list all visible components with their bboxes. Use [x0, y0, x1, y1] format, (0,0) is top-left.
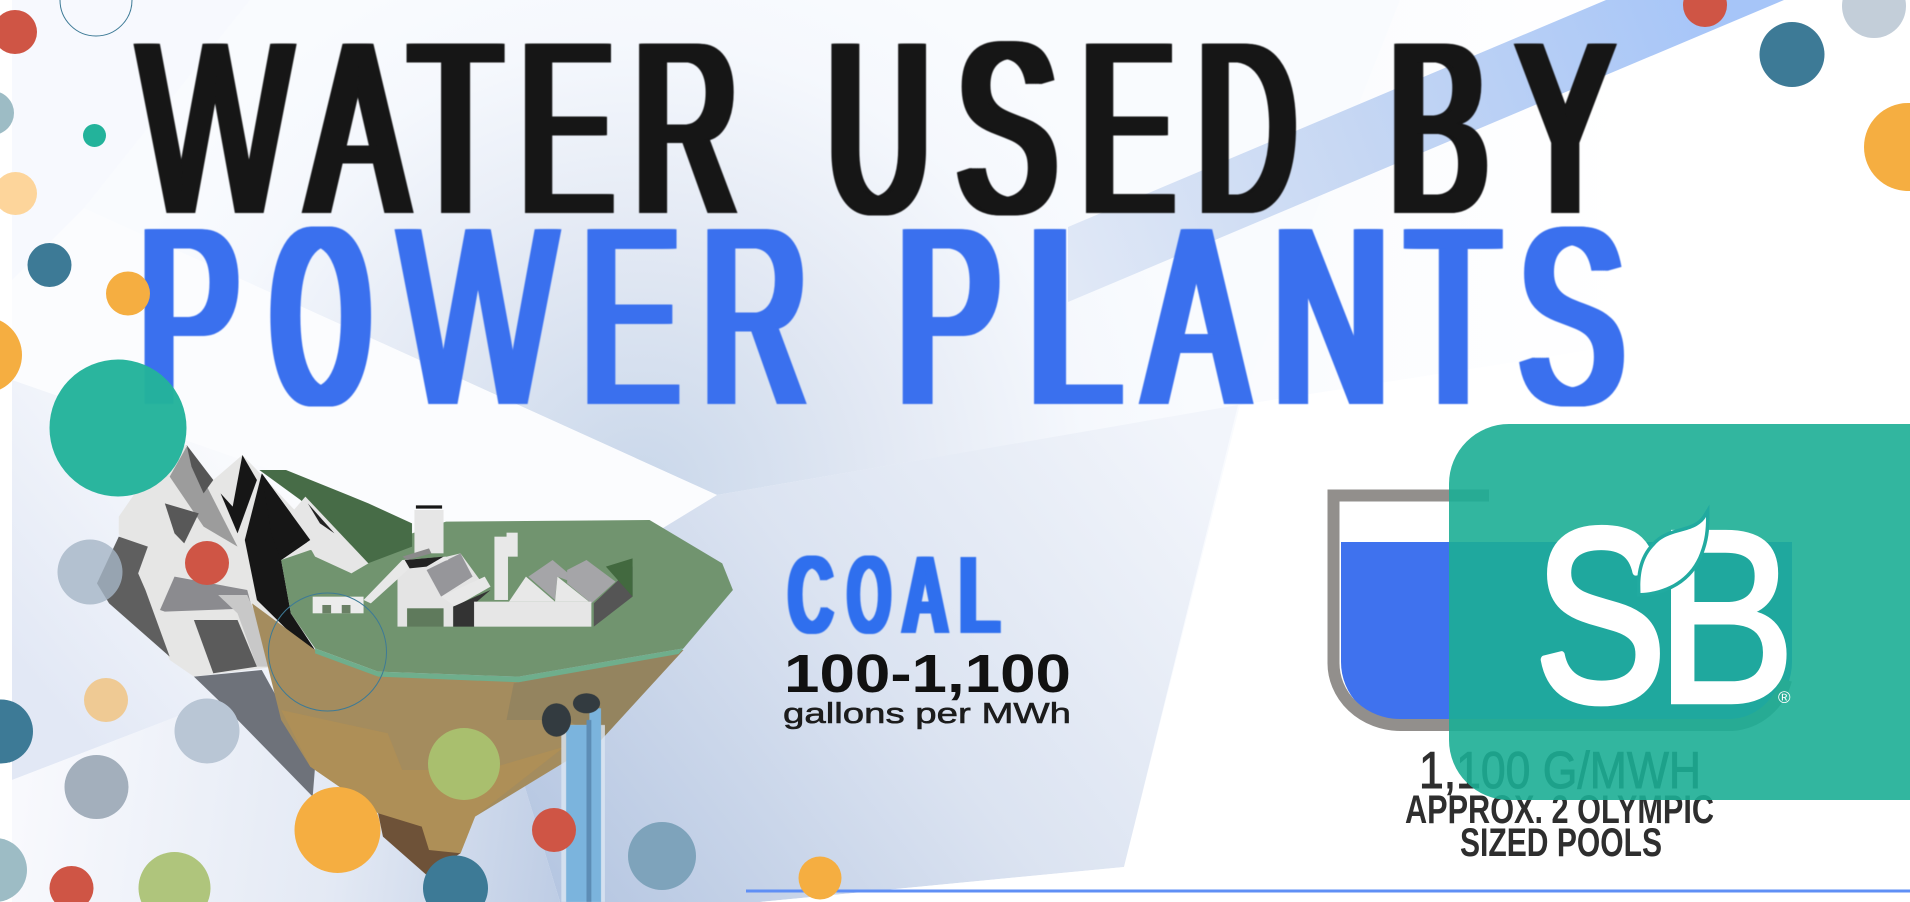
title	[132, 0, 1625, 458]
coal units: gallons per MWh	[783, 698, 1071, 730]
coal heading	[786, 534, 1002, 657]
title line 2: POWER PLANTS: W	[399, 174, 557, 458]
logo leaf	[1640, 517, 1706, 593]
tank caption	[1405, 742, 1714, 865]
coal gallons range: 100-1,100	[784, 644, 1071, 704]
power plant buildings	[313, 505, 633, 627]
SB logo	[1535, 478, 1796, 755]
registered mark: ®	[1778, 688, 1791, 707]
mountain rock face	[97, 445, 368, 797]
coal heading: A	[902, 534, 948, 657]
title line 2: POWER PLANTS: P	[898, 174, 1000, 458]
title line 2: POWER PLANTS: R	[703, 174, 806, 458]
caption: gallons: 1,100 G/MWH	[1419, 742, 1701, 800]
title line 2: POWER PLANTS: N	[1274, 174, 1388, 458]
logo letter B: B	[1656, 478, 1796, 755]
title line 2: POWER PLANTS: S	[1520, 174, 1623, 458]
discharge pipes and water	[542, 693, 605, 902]
title line 2: POWER PLANTS: L	[1028, 174, 1119, 458]
title line 2: POWER PLANTS: P	[140, 174, 239, 458]
title line 2: POWER PLANTS	[140, 174, 1625, 458]
island soil	[252, 603, 683, 875]
title line 1: WATER USED BY	[132, 0, 1618, 266]
tank icon showing water level	[1333, 496, 1792, 725]
bottom rule	[746, 890, 1910, 892]
coal heading: C	[788, 534, 833, 657]
caption: pool comparison line 2: SIZED POOLS	[1460, 821, 1662, 865]
coal heading: L	[959, 534, 1000, 657]
title line 2: POWER PLANTS: O	[274, 174, 367, 458]
title line 2: POWER PLANTS: T	[1408, 174, 1499, 458]
logo panel	[1449, 424, 1910, 800]
coal heading: O	[847, 534, 891, 657]
island grass top	[259, 470, 733, 682]
caption: pool comparison line 1: APPROX. 2 OLYMPIC	[1405, 788, 1714, 832]
floating island with coal power plant	[97, 445, 733, 902]
title line 2: POWER PLANTS: A	[1146, 174, 1246, 458]
coal figures	[783, 644, 1071, 730]
title line 2: POWER PLANTS: E	[583, 174, 678, 458]
logo letter S: S	[1535, 479, 1666, 753]
